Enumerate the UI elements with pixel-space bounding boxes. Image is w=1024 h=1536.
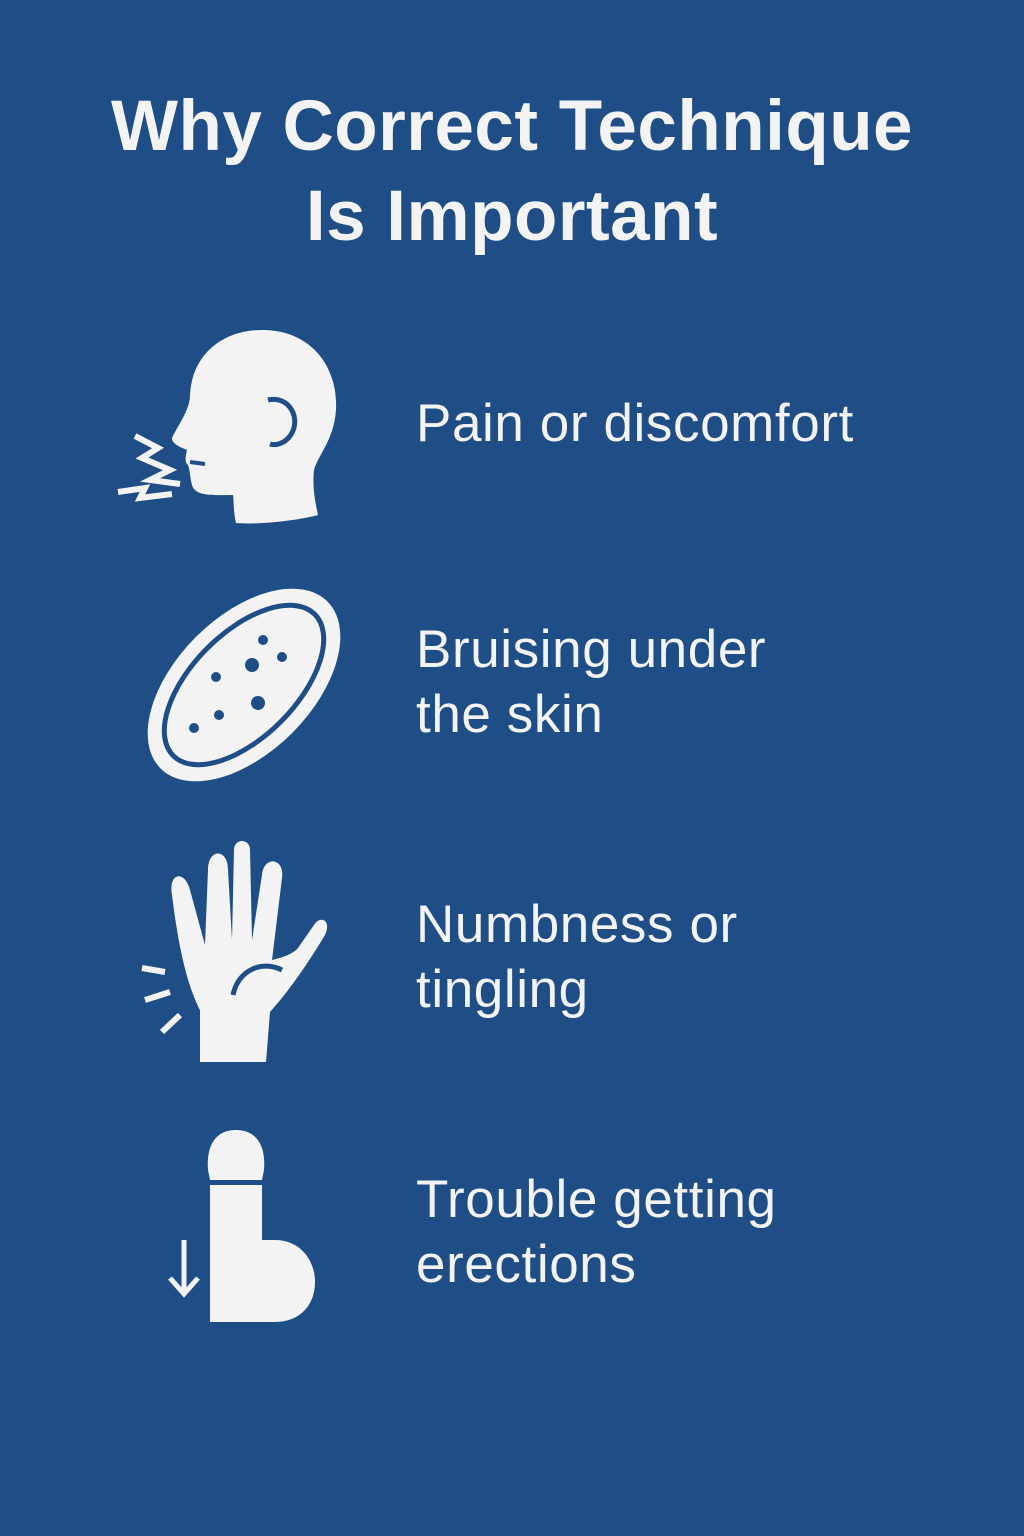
title: Why Correct Technique xyxy=(111,87,913,166)
icon: hand xyxy=(142,841,327,1062)
title xyxy=(111,87,913,256)
icon: bruise xyxy=(112,553,376,817)
text: erections: erections xyxy=(416,1235,636,1294)
text: bruising xyxy=(416,620,766,744)
text: erections xyxy=(416,1170,777,1294)
text: numbness xyxy=(416,895,738,1019)
text: bruising: the skin xyxy=(416,685,603,744)
icon: penis with down arrow xyxy=(170,1130,315,1322)
text: numbness: tingling xyxy=(416,960,589,1019)
text: pain: Pain or discomfort xyxy=(416,394,854,453)
text: numbness: Numbness or xyxy=(416,895,738,954)
text: erections: Trouble getting xyxy=(416,1170,777,1229)
text: bruising: Bruising under xyxy=(416,620,766,679)
title: Is Important xyxy=(306,177,718,256)
icon: head xyxy=(118,330,336,523)
